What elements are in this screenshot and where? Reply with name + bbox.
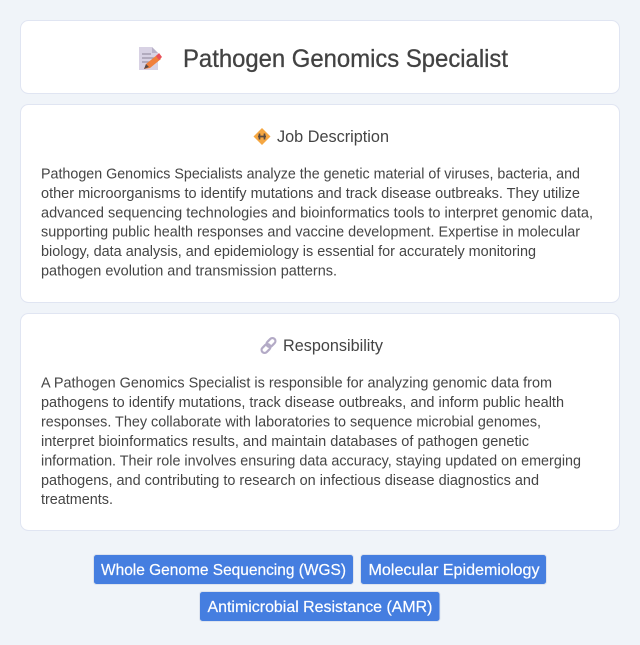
tag: whole genome sequencing xyxy=(94,554,354,584)
text block: job description xyxy=(41,166,593,280)
tag: whole genome sequencing: Whole Genome Sequencing (WGS) xyxy=(101,562,346,579)
text block: job description: pathogen evolution and transmission patterns. xyxy=(41,264,337,280)
text block: job description: biology, data analysis, and epidemiology is essential for accurately monitoring xyxy=(41,244,536,260)
text block: job description: advanced sequencing technologies and bioinformatics tools to interpret genomic data, xyxy=(41,205,593,221)
text block: responsibility: information. Their role involves ensuring data accuracy, staying updated on emerging xyxy=(41,453,581,469)
heading: job description: Job Description xyxy=(277,127,389,146)
title: Pathogen Genomics Specialist xyxy=(183,45,508,73)
tag: molecular epidemiology xyxy=(360,554,546,584)
panel: job description xyxy=(20,104,620,302)
text block: responsibility xyxy=(41,376,581,508)
icon: chain link xyxy=(260,337,277,354)
text block: responsibility: responses. They collaborate with laboratories to sequence microbial genomes, xyxy=(41,414,541,430)
tag: antimicrobial resistance xyxy=(200,592,440,622)
heading: responsibility: Responsibility xyxy=(283,336,384,355)
text block: responsibility: treatments. xyxy=(41,492,113,508)
text block: job description: Pathogen Genomics Specialists analyze the genetic material of viruses, bacteria, and xyxy=(41,166,580,182)
text block: job description: supporting public health responses and vaccine development. Expertise in molecular xyxy=(41,225,580,241)
icon: document with pencil xyxy=(139,47,162,70)
tag: antimicrobial resistance: Antimicrobial Resistance (AMR) xyxy=(208,599,432,616)
icon: diamond badge xyxy=(254,128,270,145)
text block: responsibility: pathogens, and contributing to research on infectious disease diagnostics and xyxy=(41,473,539,489)
tag: molecular epidemiology: Molecular Epidemiology xyxy=(368,562,540,579)
text block: responsibility: interpret bioinformatics results, and maintain databases of pathogen genetic xyxy=(41,434,529,450)
panel: title card xyxy=(20,20,620,94)
text block: job description: other microorganisms to identify mutations and track disease outbreaks. They utilize xyxy=(41,186,580,202)
text block: responsibility: pathogens to identify mutations, track disease outbreaks, and inform public health xyxy=(41,395,564,411)
text block: responsibility: A Pathogen Genomics Specialist is responsible for analyzing genomic data from xyxy=(41,376,552,392)
panel: responsibility xyxy=(20,314,620,530)
